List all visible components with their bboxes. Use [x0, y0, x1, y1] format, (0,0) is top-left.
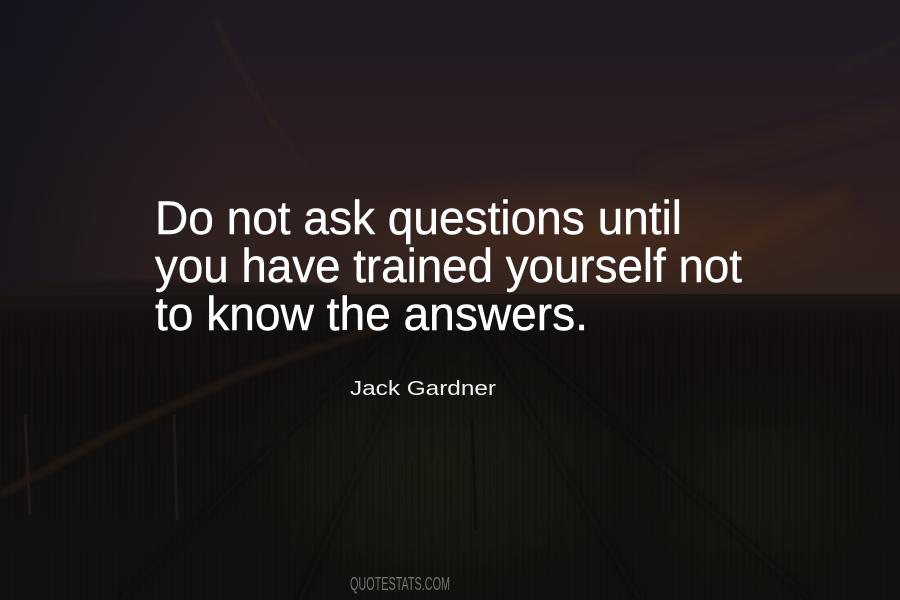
- background: dark vineyard field: [0, 280, 900, 600]
- quote text: Do not ask questions until: [155, 191, 682, 244]
- quote text: to know the answers.: [155, 287, 588, 340]
- watermark: quotestats.com: QUOTESTATS.COM: [350, 574, 450, 594]
- author name: Jack Gardner: [350, 378, 496, 400]
- quote text: [155, 191, 742, 340]
- quote text: you have trained yourself not: [155, 239, 742, 292]
- background: dusk sky: [0, 0, 900, 300]
